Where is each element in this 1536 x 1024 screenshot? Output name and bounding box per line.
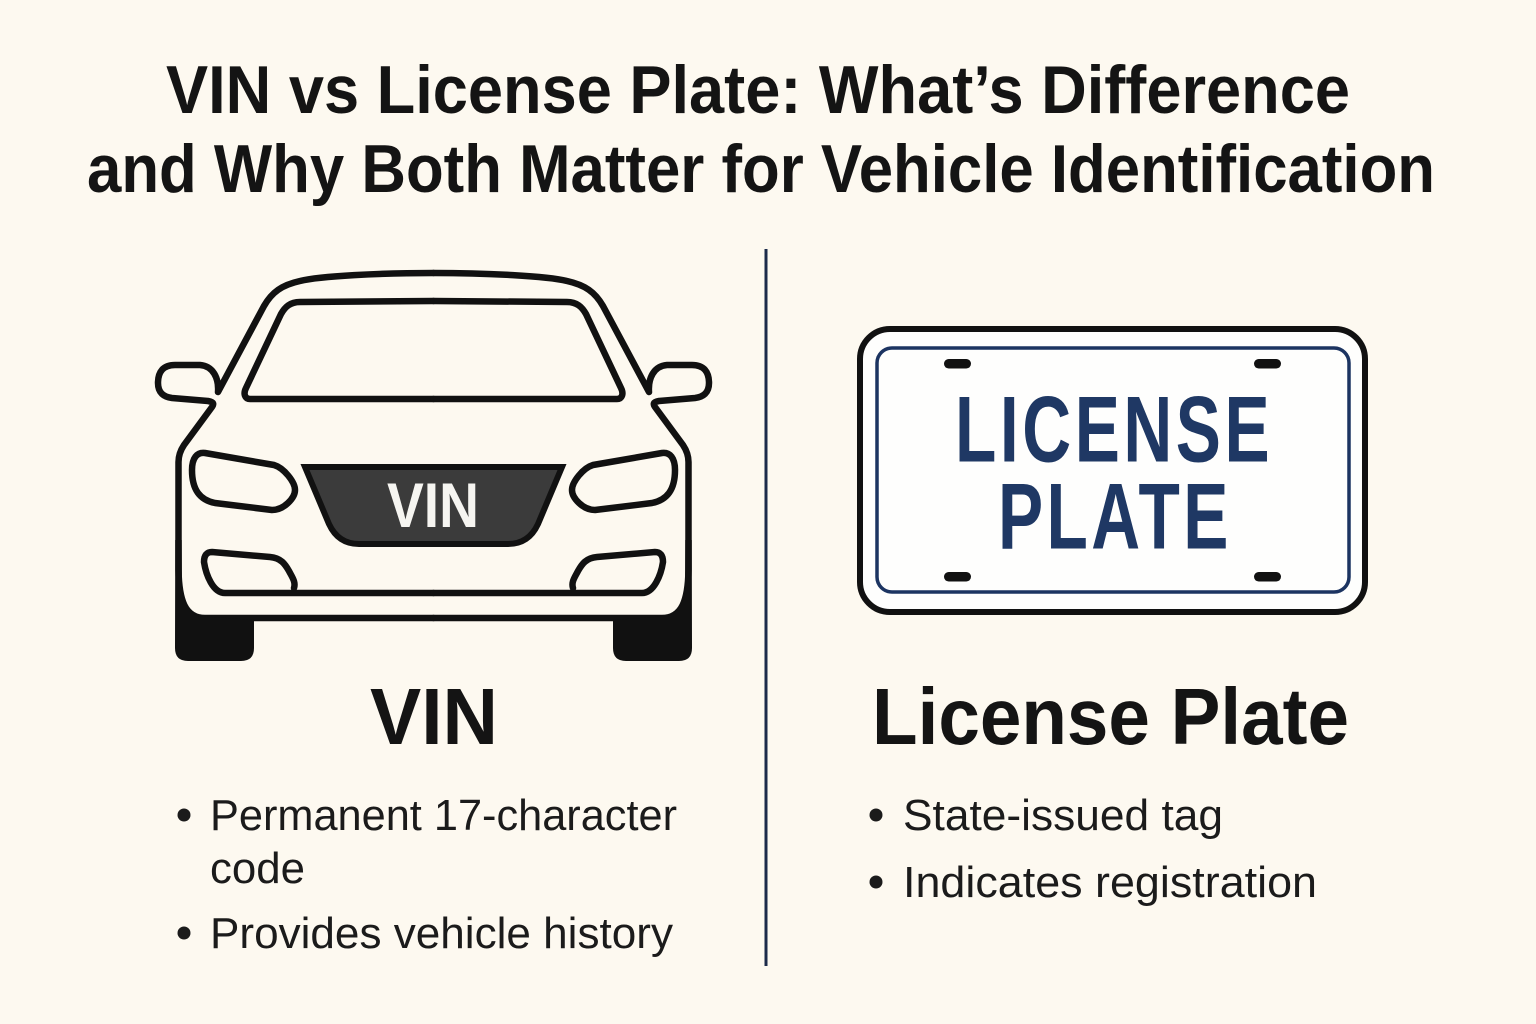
title [87,52,1435,207]
VIN bullet list: Provides vehicle history [210,909,673,958]
icon: car front view with VIN badge [158,273,709,661]
License Plate bullet list: State-issued tag [903,791,1223,840]
License Plate bullet list [870,791,1317,907]
VIN bullet list: code [210,844,305,893]
VIN bullet list [178,791,677,958]
icon: license plate [860,329,1365,612]
icon: license plate: LICENSE [955,378,1270,482]
License Plate bullet list: Indicates registration [903,858,1317,907]
car left half outline [158,273,434,661]
VIN bullet list: Permanent 17-character [210,791,677,840]
center divider [764,249,768,966]
heading: VIN: VIN [370,672,498,761]
icon: license plate: PLATE [998,465,1228,569]
car right half outline [434,273,709,661]
title: VIN vs License Plate: What’s Difference [166,52,1350,128]
title: and Why Both Matter for Vehicle Identification [87,131,1435,207]
VIN grille badge [305,467,562,544]
heading: License Plate: License Plate [872,672,1349,761]
VIN grille badge: VIN [387,471,479,541]
